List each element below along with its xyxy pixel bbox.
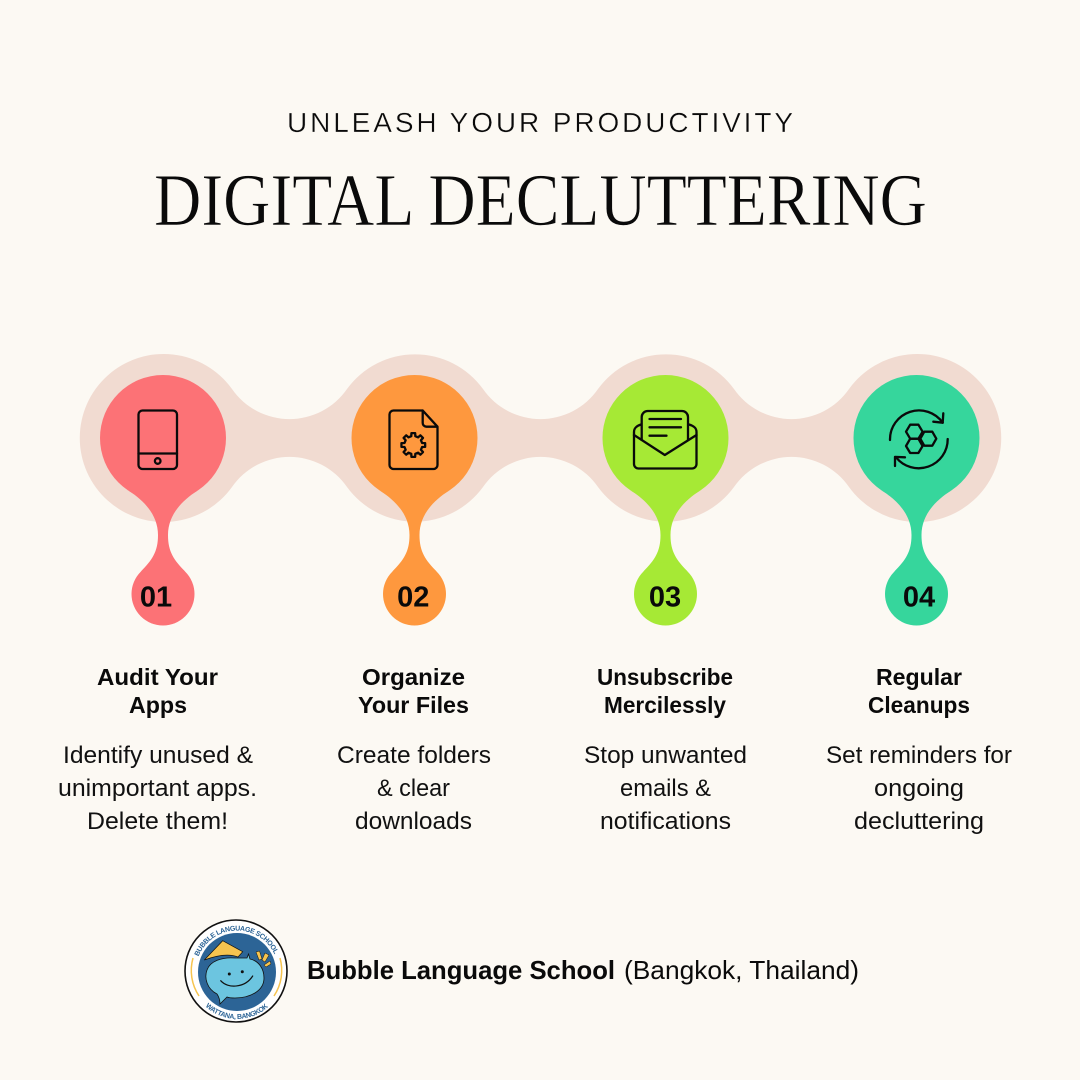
text: step 4 description: decluttering (854, 808, 984, 835)
step 3 drop marker (602, 375, 728, 626)
text: step 1 description: Identify unused & (63, 742, 253, 769)
heading: Organize Your Files: Your Files (358, 692, 469, 718)
text: step 1 description: unimportant apps. (58, 775, 257, 802)
step number 03: 03 (649, 581, 681, 613)
footer: school name (307, 955, 859, 985)
heading: Regular Cleanups: Cleanups (868, 692, 970, 718)
text: step 4 description: Set reminders for (826, 742, 1012, 769)
footer: school name: Bubble Language School (307, 955, 615, 985)
icon: tablet (138, 410, 177, 469)
logo: Bubble Language School badge (184, 919, 288, 1023)
title: DIGITAL DECLUTTERING (154, 160, 927, 242)
text: step 3 description: Stop unwanted (584, 742, 747, 769)
heading: Regular Cleanups: Regular (876, 664, 962, 690)
heading: Regular Cleanups (868, 664, 970, 718)
icon: open envelope with letter (634, 411, 696, 468)
icon: refresh cycle with hexagons (890, 410, 948, 468)
text: step 2 description (337, 742, 491, 835)
text: step 2 description: downloads (355, 808, 472, 835)
heading: Audit Your Apps: Audit Your (97, 664, 218, 690)
subtitle: UNLEASH YOUR PRODUCTIVITY (287, 107, 793, 138)
text: step 3 description (584, 742, 747, 835)
text: step 1 description: Delete them! (87, 808, 228, 835)
heading: Audit Your Apps (97, 664, 218, 718)
footer: school name: (Bangkok, Thailand) (624, 955, 859, 985)
text: step 2 description: Create folders (337, 742, 491, 769)
step 1 drop marker (100, 375, 226, 626)
text: step 1 description (58, 742, 257, 835)
step 4 drop marker (854, 375, 980, 626)
step number 01: 01 (140, 581, 172, 613)
step number 02: 02 (397, 581, 429, 613)
text: step 3 description: emails & (620, 775, 711, 802)
text: step 3 description: notifications (600, 808, 731, 835)
icon: file with gear (390, 410, 438, 469)
heading: Unsubscribe Mercilessly (597, 664, 733, 718)
step number 04: 04 (903, 581, 935, 613)
connecting band (80, 354, 1001, 522)
step 2 drop marker (352, 375, 478, 626)
heading: Audit Your Apps: Apps (129, 692, 187, 718)
text: step 4 description (826, 742, 1012, 835)
heading: Organize Your Files (358, 664, 469, 718)
text: step 2 description: & clear (377, 775, 450, 802)
logo: Bubble Language School badge: BUBBLE LANGUAGE SCHOOL (194, 926, 278, 956)
heading: Unsubscribe Mercilessly: Mercilessly (604, 692, 726, 718)
heading: Organize Your Files: Organize (362, 664, 465, 690)
logo: Bubble Language School badge: WATTANA, BANGKOK (206, 1002, 268, 1020)
heading: Unsubscribe Mercilessly: Unsubscribe (597, 664, 733, 690)
text: step 4 description: ongoing (874, 775, 964, 802)
